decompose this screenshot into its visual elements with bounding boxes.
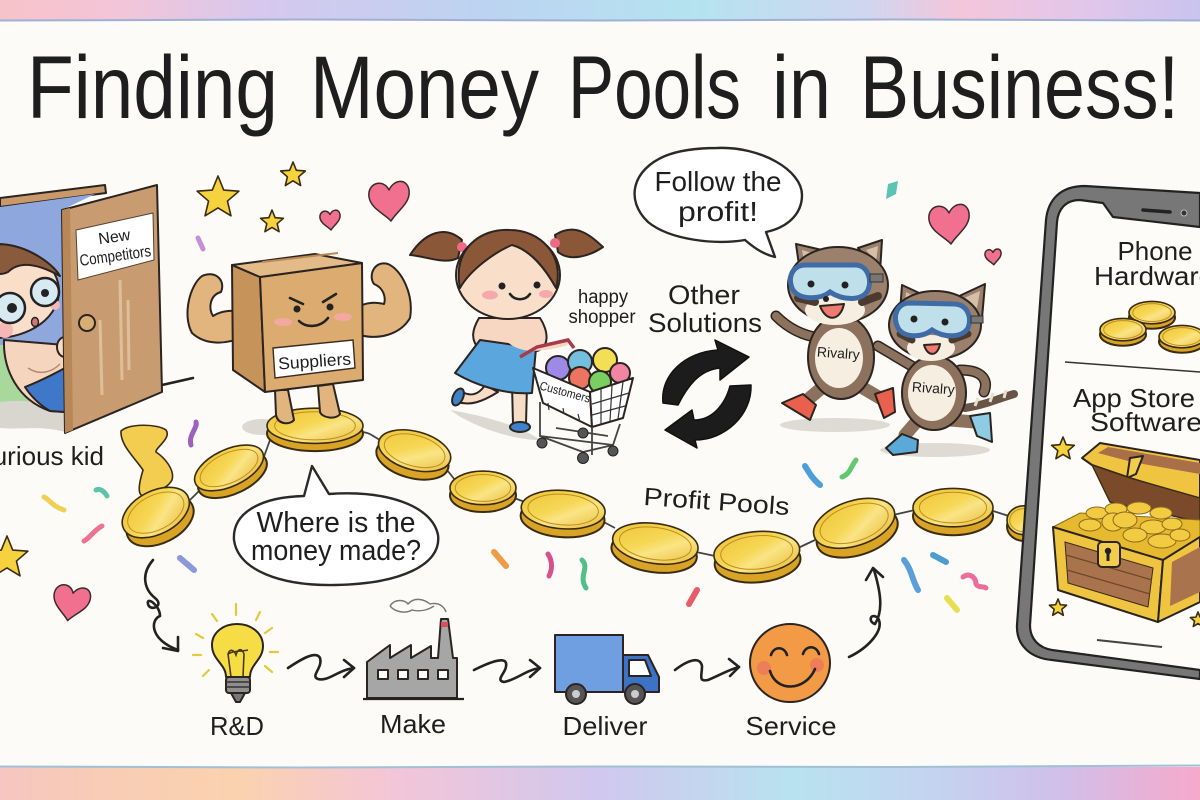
app store software text: [1073, 383, 1200, 437]
phone hardware text: [1094, 236, 1200, 291]
door: [62, 185, 162, 433]
door frame and interior: [0, 185, 193, 432]
label: Customers: Customers: [538, 379, 592, 406]
phone screen: [1030, 200, 1200, 670]
limbs: [878, 346, 985, 392]
speaker and camera: [1143, 210, 1170, 212]
label: Rivalry: Rivalry: [816, 344, 860, 362]
arrow: Deliver to Service: [675, 659, 739, 680]
bottom pastel border: [0, 766, 1200, 800]
label: happy shopper: [568, 287, 636, 328]
goggles: [895, 303, 969, 336]
shoes: [886, 434, 918, 455]
title: Pools: [568, 37, 741, 137]
hearts and confetti, upper right: [886, 181, 1001, 265]
sign: New Competitors: New: [97, 227, 132, 248]
frame and wheels: [540, 402, 620, 455]
arrows: cycle: [663, 340, 751, 448]
label: Suppliers: [273, 340, 355, 378]
pigtails: [410, 232, 462, 261]
top pastel border: [0, 0, 1200, 20]
goggles: [791, 265, 869, 298]
phone stars: [1049, 437, 1200, 626]
arms: [187, 274, 243, 343]
head: [788, 247, 888, 323]
head: [456, 231, 560, 319]
icon: factory: [363, 599, 464, 699]
arm: [505, 335, 565, 348]
arrow: Service to Profit Pools: [849, 568, 883, 657]
legs and shoes: [458, 385, 498, 404]
title: Finding: [27, 37, 278, 137]
torso: [473, 318, 547, 352]
arrow: start to R&D: [145, 560, 178, 651]
app store software text: Software: [1090, 407, 1200, 437]
label: Service: Service: [746, 711, 836, 741]
ears: [900, 285, 930, 312]
ears: [796, 244, 822, 272]
chest body: [1053, 527, 1163, 622]
stars and hearts, upper left: [197, 162, 409, 232]
coin trail: [114, 423, 1041, 586]
face: [482, 282, 553, 300]
phone: [1017, 186, 1200, 679]
speech bubble: Where is the money made: money made?: [251, 535, 421, 567]
label: happy shopper: happy: [578, 287, 628, 308]
label: Deliver: Deliver: [562, 711, 648, 741]
basket: [533, 368, 592, 427]
speech bubble: Where is the money made: [234, 466, 438, 585]
shoes: [782, 394, 816, 420]
label: happy shopper: shopper: [568, 307, 636, 328]
mouth: [820, 304, 844, 318]
label: Make: Make: [380, 709, 446, 739]
door knob: [79, 315, 95, 331]
speech bubble: Where is the money made: Where is the: [256, 507, 416, 539]
confetti: [44, 238, 986, 610]
icon: smiley service: [750, 624, 830, 702]
character: rivalry raccoon right: [878, 284, 1014, 457]
treasure chest: [1053, 443, 1200, 622]
icon: light bulb R&D: [193, 604, 278, 702]
title: in: [772, 37, 831, 137]
sign: New Competitors: [76, 213, 154, 280]
keyhole plate: [1098, 542, 1120, 567]
title: [27, 37, 1179, 137]
label: Other Solutions: Solutions: [648, 308, 762, 338]
character: suppliers box: [187, 253, 411, 423]
tail: [965, 394, 1014, 408]
limbs: [776, 316, 820, 338]
speech bubble: Follow the profit: profit!: [678, 196, 758, 227]
home bar: [1097, 640, 1162, 647]
ground shadow: [450, 410, 540, 440]
phone frame: [1017, 186, 1200, 679]
app store software text: App Store: [1073, 383, 1195, 413]
label: R&D: R&D: [210, 711, 264, 741]
head: [889, 291, 981, 359]
shopping cart with balls: [520, 340, 633, 464]
body: [808, 315, 874, 399]
character: rivalry raccoon left: [776, 240, 895, 432]
label: Other Solutions: [648, 280, 762, 338]
arrow: R&D to Make: [288, 655, 354, 679]
balls: [546, 348, 630, 393]
label: Suppliers: Suppliers: [278, 349, 352, 374]
chest interior: [1092, 465, 1200, 522]
phone coins: [1100, 301, 1200, 353]
phone hardware text: Phone: [1118, 236, 1192, 266]
speech bubble: Follow the profit: Follow the: [654, 166, 782, 197]
label: Profit Pools: Profit Pools: [643, 483, 790, 521]
left star and heart: [0, 536, 93, 625]
coin pedestal under suppliers: [242, 408, 363, 451]
scene: curious kid behind door: [0, 185, 193, 433]
mouth: [924, 344, 940, 354]
lid: [1082, 443, 1200, 500]
ground shadow: [880, 443, 990, 457]
label: Rivalry: Rivalry: [911, 379, 955, 397]
sign: New Competitors: Competitors: [79, 243, 152, 270]
body: [902, 356, 966, 430]
divider: [1065, 362, 1200, 372]
handle: [520, 340, 574, 357]
box: [232, 265, 265, 392]
gold pile: [1053, 502, 1200, 560]
speech bubble: Follow the profit: [635, 148, 802, 257]
character: happy shopper girl: [410, 230, 603, 440]
melted gold squiggle: [121, 425, 173, 496]
ground shadow: [780, 418, 890, 432]
arrow: Make to Deliver: [474, 660, 540, 682]
legs: [275, 390, 294, 423]
skirt: [455, 340, 536, 393]
title: Money: [310, 37, 539, 137]
face: [274, 294, 352, 326]
curious kid character: [0, 244, 73, 412]
label: Other Solutions: Other: [668, 280, 740, 310]
connector line: [190, 432, 1015, 556]
icon: delivery truck: [555, 635, 659, 704]
